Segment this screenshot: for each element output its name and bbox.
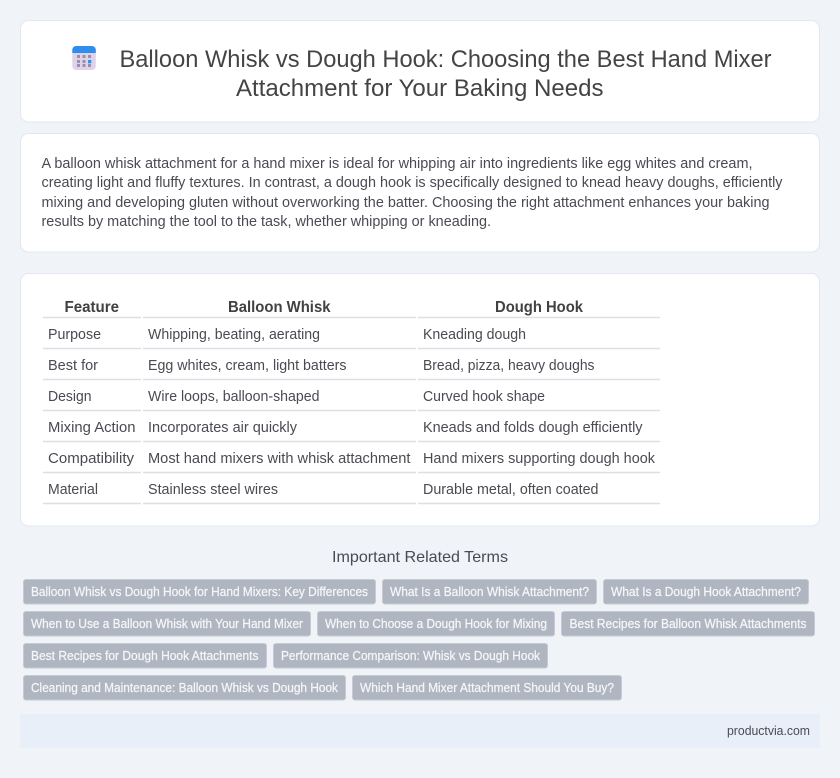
tag: Performance Comparison: Whisk vs Dough Hook [281,649,541,663]
tag [24,580,376,604]
row: purpose: Whipping, beating, aerating [148,327,320,343]
row: compatibility: Compatibility [48,451,135,467]
tag: When to Use a Balloon Whisk with Your Hand Mixer [31,617,303,631]
related terms tags [24,580,814,700]
tag [274,644,548,668]
tag [382,580,596,604]
intro text: A balloon whisk attachment for a hand mixer is ideal for whipping air into ingredients like egg whites and cream, [42,156,752,172]
tag [352,676,622,700]
panel: introduction [20,134,820,252]
row: purpose: Kneading dough [423,327,526,343]
table header [64,299,583,316]
row: compatibility: Hand mixers supporting dough hook [423,451,656,467]
row: compatibility [48,451,656,467]
tag: Which Hand Mixer Attachment Should You Buy? [360,681,614,695]
row: compatibility: Most hand mixers with whisk attachment [148,451,410,467]
tag: What Is a Balloon Whisk Attachment? [390,585,589,599]
table header: Feature [64,299,119,316]
row: purpose [48,327,526,343]
title: Attachment for Your Baking Needs [236,75,604,102]
title: Balloon Whisk vs Dough Hook: Choosing the Best Hand Mixer [120,46,772,73]
footer source text: productvia.com [727,723,810,738]
heading: important related terms: Important Related Terms [332,549,508,566]
panel: header [20,20,820,122]
tag: Best Recipes for Balloon Whisk Attachments [570,617,806,631]
tag: Best Recipes for Dough Hook Attachments [31,649,258,663]
icon: calendar [72,46,96,70]
intro text: mixing and developing gluten without overworking the batter. Choosing the right attachment enhances your baking [42,195,770,211]
row: purpose: Purpose [48,327,101,343]
tag [604,580,808,604]
footer [20,714,820,748]
row: design: Wire loops, balloon-shaped [148,389,320,405]
tag: When to Choose a Dough Hook for Mixing [325,617,547,631]
tag [562,612,814,636]
row: design: Curved hook shape [423,389,545,405]
row: mixing action: Kneads and folds dough efficiently [423,420,643,436]
row: material: Durable metal, often coated [423,482,598,498]
panel: comparison table [20,274,820,526]
intro text: creating light and fluffy textures. In contrast, a dough hook is specifically designed to knead heavy doughs, efficiently [42,175,783,191]
tag [24,612,310,636]
row: material: Stainless steel wires [148,482,278,498]
row: best for: Egg whites, cream, light batters [148,358,346,374]
row: best for [48,358,594,374]
table header: Dough Hook [495,299,583,316]
row: best for: Bread, pizza, heavy doughs [423,358,594,374]
row: design [48,389,545,405]
tag [318,612,554,636]
row: mixing action [48,420,643,436]
tag: Cleaning and Maintenance: Balloon Whisk vs Dough Hook [31,681,339,695]
row: material: Material [48,482,98,498]
tag: What Is a Dough Hook Attachment? [611,585,801,599]
row: mixing action: Mixing Action [48,420,136,436]
tag [24,676,346,700]
intro text: results by matching the tool to the task, whether whipping or kneading. [42,214,491,230]
tag: Balloon Whisk vs Dough Hook for Hand Mixers: Key Differences [31,585,368,599]
row: material [48,482,598,498]
tag [24,644,266,668]
row: mixing action: Incorporates air quickly [148,420,298,436]
row: design: Design [48,389,92,405]
row: best for: Best for [48,358,98,374]
table header: Balloon Whisk [228,299,331,316]
